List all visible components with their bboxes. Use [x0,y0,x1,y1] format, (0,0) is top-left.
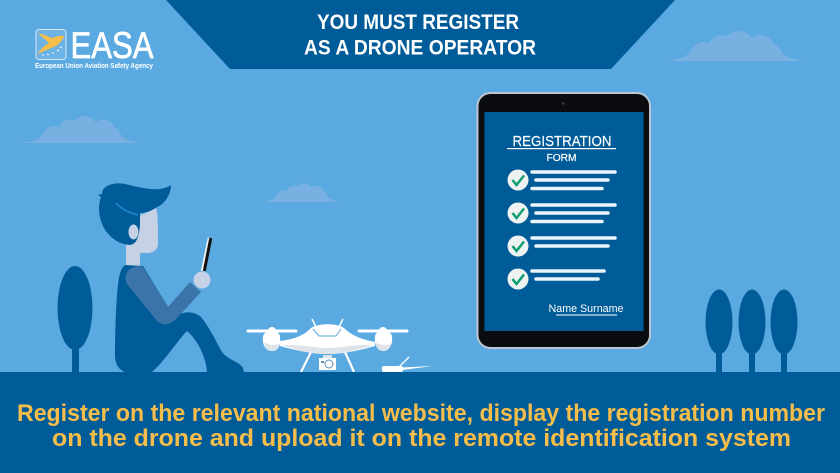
EASA logo: EASA [70,25,154,66]
legs [301,352,354,372]
EASA logo: European Union Aviation Safety Agency [35,61,153,70]
bottom caption: on the drone and upload it on the remote identification system [52,425,791,452]
EASA logo [35,25,154,70]
title banner: AS A DRONE OPERATOR [304,36,536,60]
trees: right group [706,290,798,373]
hair [98,183,171,245]
form heading: FORM [546,152,576,164]
face and neck [126,208,158,266]
person sitting with phone [98,183,244,373]
bottom caption [17,400,825,452]
form heading: REGISTRATION [512,133,612,150]
arm [125,266,201,324]
tablet [478,93,650,348]
hair highlight [116,203,138,215]
tablet screen [484,112,644,331]
torso and legs [115,265,244,373]
controller [382,357,433,372]
check icons [508,170,528,290]
form heading [507,133,616,164]
tree: left [58,266,92,373]
body [280,324,375,354]
cloud: top left [20,116,143,143]
antennas [312,319,343,331]
title banner [166,0,675,69]
form lines [532,172,615,279]
ground band [0,372,840,473]
hand [194,272,210,288]
cloud: top right [664,31,807,61]
phone [203,238,211,271]
drone [248,319,433,372]
bottom caption: Register on the relevant national website, display the registration number [17,400,825,427]
cloud: middle [261,183,343,202]
camera [319,355,336,370]
icon: logo bird [36,30,66,60]
camera dot [562,102,564,105]
title banner: YOU MUST REGISTER [317,10,519,34]
ear [128,224,138,240]
signature: Name Surname [548,303,624,315]
left rotor [248,327,296,351]
right rotor [359,327,407,351]
